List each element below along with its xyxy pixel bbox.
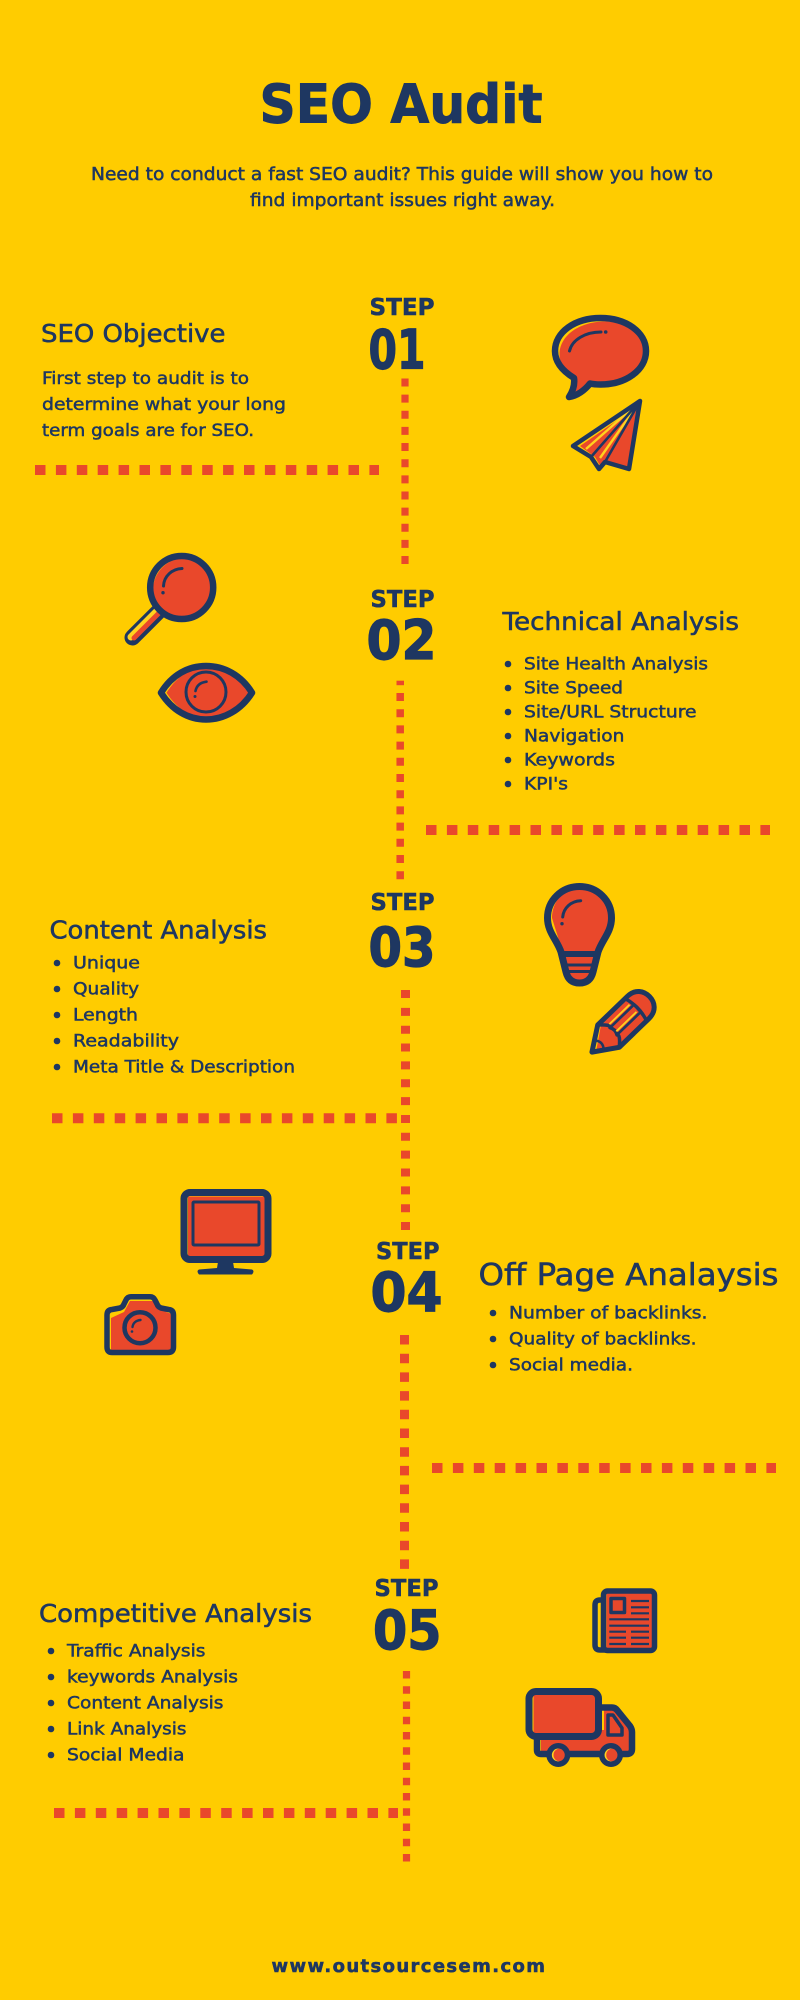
list: competitive items: Social Media (67, 1746, 184, 1766)
list: content items (54, 954, 295, 1078)
panel: step 01 (41, 293, 650, 469)
list: content items: Quality (73, 980, 139, 1000)
list: competitive items: keywords Analysis (67, 1668, 238, 1688)
icon: newspaper (595, 1591, 658, 1653)
list: off page items (490, 1304, 708, 1376)
list: technical items: KPI's (524, 774, 568, 794)
intro text: find important issues right away. (250, 190, 555, 211)
icon: monitor (184, 1192, 272, 1274)
list: content items: Readability (73, 1032, 179, 1052)
panel: step 04 (107, 1192, 778, 1376)
list: content items: Unique (73, 954, 140, 974)
title: SEO Audit (260, 72, 542, 136)
step 02 label: 02 (366, 609, 436, 672)
icon: magnifying glass (131, 556, 217, 638)
footer url: www.outsourcesem.com (272, 1956, 545, 1977)
step 01 label (368, 293, 434, 382)
connector: step 04 horizontal (432, 1463, 776, 1473)
step 05 label: 05 (373, 1599, 442, 1662)
step 03 label: 03 (368, 916, 436, 979)
heading: Competitive Analysis: Competitive Analysis (39, 1599, 312, 1628)
connector: step 01 horizontal (35, 465, 379, 475)
list: technical items: Navigation (524, 726, 624, 746)
body text: objective: First step to audit is to (42, 369, 249, 389)
icon: speech bubble (555, 318, 650, 400)
body text: objective: determine what your long (42, 395, 286, 415)
step 01 label: STEP (370, 293, 434, 321)
connector: step 01 vertical (401, 378, 409, 564)
list: off page items: Number of backlinks. (509, 1304, 708, 1324)
heading: Content Analysis: Content Analysis (50, 916, 267, 944)
list: technical items: Keywords (524, 750, 615, 770)
list: content items: Meta Title & Description (73, 1058, 295, 1078)
icon: camera (107, 1297, 178, 1357)
icon: paper plane (573, 401, 645, 469)
step 04 label: STEP (376, 1237, 440, 1265)
icon: light bulb (548, 886, 615, 990)
step 03 label (368, 888, 436, 979)
list: technical items: Site Health Analysis (524, 654, 708, 674)
connector: step 03 horizontal (52, 1113, 397, 1123)
connector: step 05 horizontal (54, 1808, 398, 1818)
connector: step 04 vertical (400, 1335, 409, 1569)
connector: step 02 horizontal (426, 825, 770, 835)
icon: pencil (589, 989, 657, 1055)
body text: objective (42, 369, 286, 441)
icon: eye (161, 666, 258, 720)
list: competitive items (48, 1642, 238, 1766)
step 01 label: 01 (368, 318, 426, 382)
heading: Off Page Analaysis: Off Page Analaysis (478, 1258, 778, 1293)
step 04 label: 04 (370, 1261, 442, 1324)
list: technical items (505, 654, 708, 794)
body text: objective: term goals are for SEO. (42, 421, 254, 441)
list: technical items: Site Speed (524, 678, 623, 698)
list: competitive items: Content Analysis (67, 1694, 224, 1714)
list: content items: Length (73, 1006, 138, 1026)
list: technical items: Site/URL Structure (524, 702, 696, 722)
panel: step 02 (131, 556, 739, 794)
heading: Technical Analysis: Technical Analysis (501, 607, 739, 636)
list: off page items: Social media. (509, 1356, 633, 1376)
step 05 label (373, 1574, 442, 1662)
intro text (91, 164, 713, 211)
connector: step 02 vertical (396, 681, 404, 881)
connector: step 05 vertical (403, 1671, 410, 1862)
step 03 label: STEP (370, 888, 434, 916)
list: competitive items: Traffic Analysis (66, 1642, 206, 1662)
step 02 label: STEP (370, 585, 434, 613)
step 05 label: STEP (374, 1574, 438, 1602)
icon: delivery truck (529, 1692, 636, 1764)
list: off page items: Quality of backlinks. (509, 1330, 696, 1350)
intro text: Need to conduct a fast SEO audit? This guide will show you how to (91, 164, 713, 185)
panel: step 05 (39, 1574, 658, 1766)
step 02 label (366, 585, 436, 672)
panel: step 03 (50, 886, 663, 1078)
heading: SEO Objective: SEO Objective (41, 319, 226, 348)
connector: step 03 vertical (401, 990, 410, 1230)
list: competitive items: Link Analysis (67, 1720, 187, 1740)
